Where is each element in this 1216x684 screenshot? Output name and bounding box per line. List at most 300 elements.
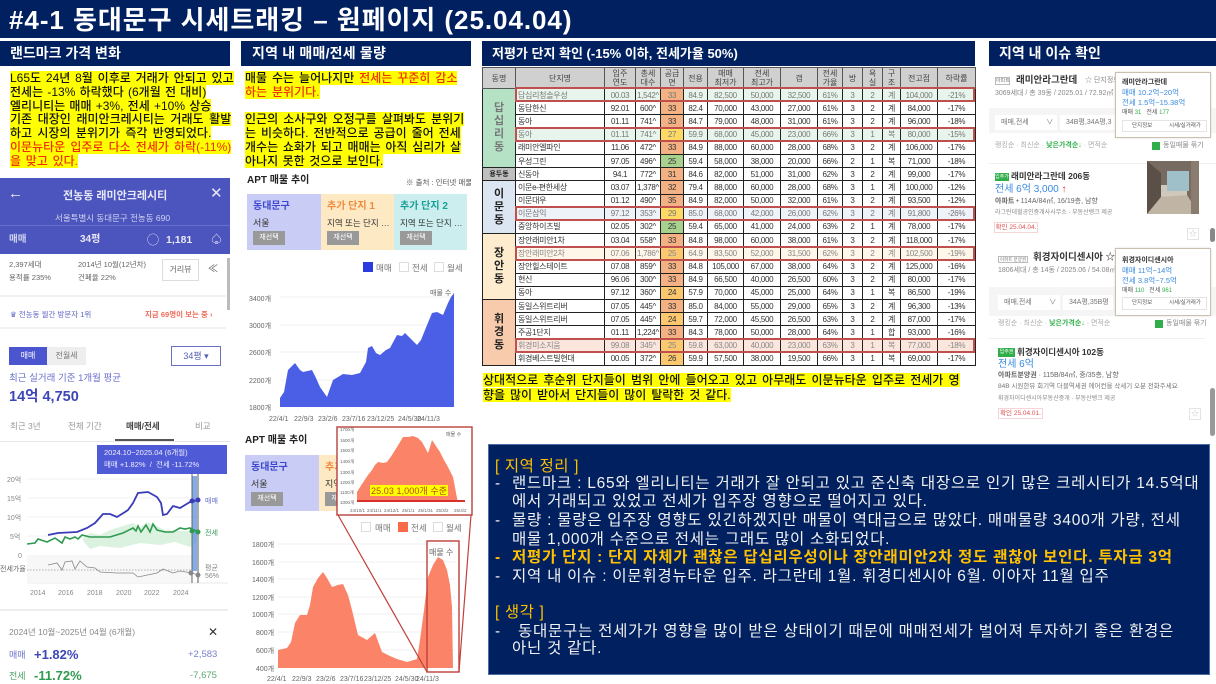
area chart: sale listings: 매물 수	[430, 289, 452, 297]
inset: rent listings zoomed chart: 25.03 1,000개 수준	[371, 486, 447, 496]
panel: Hwigyeong Xi listing: 34A평,35B평	[1069, 299, 1109, 306]
table: undervalued complexes: 50,000	[751, 196, 773, 205]
table: undervalued complexes: 59.4	[688, 157, 703, 166]
area chart: sale listings: 22/4/1	[269, 416, 289, 423]
table: undervalued complexes: 61%	[822, 196, 838, 205]
table: undervalued complexes: -17%	[948, 170, 965, 179]
line chart: sale and rent prices	[0, 474, 228, 611]
table: undervalued complexes: 84.3	[688, 328, 703, 337]
table: undervalued complexes: -18%	[948, 341, 965, 350]
panel: La Grande listing: 전세 6억 3,000 ↑	[995, 184, 1067, 195]
table: undervalued complexes: 372^	[640, 354, 656, 363]
table: undervalued complexes: 45,000	[751, 288, 773, 297]
chart heading: APT listings trend 1: APT 매물 추이	[247, 175, 309, 186]
inset: rent listings zoomed chart: 24/12/1	[384, 508, 400, 513]
table: undervalued complexes: 2	[870, 262, 875, 271]
line chart: sale and rent prices: 2024	[173, 590, 189, 597]
inset: rent listings zoomed chart: 25/1/31	[418, 508, 434, 513]
panel: complex info	[0, 258, 230, 310]
area chart: rent listings: 24/11/3	[416, 676, 439, 683]
table: undervalued complexes: 19,500	[788, 354, 810, 363]
text block: landmark summary: 기존 대장인 래미안크레시티는 거래도 활발	[10, 112, 231, 126]
table: undervalued complexes: 60%	[822, 275, 838, 284]
tab buttons	[9, 346, 221, 366]
table: undervalued complexes: 1	[870, 328, 875, 337]
table: undervalued complexes: 55,000	[751, 302, 773, 311]
table: undervalued complexes: 방	[849, 74, 856, 82]
table: undervalued complexes: 3	[850, 315, 855, 324]
table: undervalued complexes: 29	[668, 209, 676, 218]
table: undervalued complexes: 88,000	[714, 143, 737, 152]
text block: table conclusion: 상대적으로 후순위 단지들이 범위 안에 들어오고 있고 아무래도 이문뉴타운 입주로 전세가 영	[483, 373, 960, 387]
table: undervalued complexes: 3	[850, 341, 855, 350]
text block: landmark summary: 이문뉴타운 입주로 다소 전세가 하락(-11%)	[10, 140, 231, 154]
table: undervalued complexes: 32,500	[788, 91, 810, 100]
line chart: sale and rent prices: 2014	[30, 590, 46, 597]
table: undervalued complexes: 772^	[640, 170, 656, 179]
table: undervalued complexes: 27	[668, 130, 676, 139]
panel: La Grande listing: 라그란데힐공인중개사사무소 · 부동산뱅크 제공	[995, 210, 1112, 216]
visitor ranking strip: 지금 69명이 보는 중 ›	[145, 310, 212, 319]
table: undervalued complexes: 25	[668, 249, 676, 258]
table: undervalued complexes: 86,500	[908, 288, 930, 297]
tab buttons: 34평 ▾	[183, 351, 209, 361]
table: undervalued complexes: 02.05	[611, 222, 629, 231]
table: undervalued complexes: 24	[668, 288, 676, 297]
table: undervalued complexes: 00.03	[611, 91, 629, 100]
table: undervalued complexes: 45,500	[751, 315, 773, 324]
inset: rent listings zoomed chart: 1100개	[340, 489, 354, 496]
panel: regional summary: 아닌 것 같다.	[512, 640, 602, 657]
area chart: sale listings: 22/9/3	[294, 416, 314, 423]
popup: La Grande price range: 단지정보	[1132, 123, 1152, 129]
panel: Hwigyeong Xi listing: 랭킹순 · 최신순 · 낮은가격순↓ · 면적순	[998, 320, 1110, 327]
table: undervalued complexes: 496^	[640, 157, 656, 166]
table: undervalued complexes: 29,000	[788, 302, 810, 311]
panel: complex info: 용적률 235%	[9, 273, 51, 282]
table: undervalued complexes: 2	[870, 91, 875, 100]
table: undervalued complexes: 가율	[823, 78, 837, 87]
table: undervalued complexes: 62%	[822, 170, 838, 179]
table: undervalued complexes: 1,542^	[637, 91, 659, 100]
table: undervalued complexes: 계	[888, 196, 895, 205]
table: undervalued complexes: 59.9	[688, 354, 703, 363]
table: undervalued complexes: -19%	[948, 288, 965, 297]
table: undervalued complexes: 85.0	[688, 302, 703, 311]
table: undervalued complexes: 125,000	[906, 262, 932, 271]
panel: La Grande listing: 3069세대 / 총 39동 / 2025.01 / 72.92㎡ ~	[995, 90, 1119, 97]
source note: ※ 출처 : 인터넷 매물	[406, 178, 471, 187]
table: undervalued complexes: -17%	[948, 315, 965, 324]
table: undervalued complexes: 동명	[492, 74, 506, 82]
panel: Hwigyeong Xi listing: 확인 25.04.01.	[1000, 410, 1041, 417]
panel: complex info: 2,397세대	[9, 260, 42, 269]
table: undervalued complexes: 68,000	[714, 130, 737, 139]
table: undervalued complexes: 이문e-편한세상	[518, 183, 567, 192]
heading: undervalued complexes: 저평가 단지 확인 (-15% 이하, 전세가율 50%)	[492, 46, 738, 61]
text block: landmark summary	[10, 71, 234, 168]
icon: star: ☆	[1189, 229, 1197, 238]
table: undervalued complexes: 동아	[518, 117, 532, 126]
table: undervalued complexes: -17%	[948, 104, 965, 113]
panel: La Grande listing: 매매,전세 ∨	[1001, 119, 1053, 126]
area chart: sale listings: 24/11/3	[417, 416, 440, 423]
text block: landmark summary: L65도 24년 8월 이후로 거래가 안되고 있고	[10, 71, 234, 85]
area chart: sale listings: 2600개	[249, 348, 271, 357]
comparison cards 2: 동대문구	[251, 462, 288, 473]
table: undervalued complexes: 3	[850, 104, 855, 113]
panel: Hwigyeong Xi listing: 휘경자이디센시아 ☆	[1033, 252, 1115, 263]
table: undervalued complexes: 2	[870, 170, 875, 179]
text block: listings summary: 아나지 못한 것으로 보인다.	[245, 154, 383, 168]
text block: listings summary: 개수는 쇼화가 되고 매매는 아직 심리가 살	[245, 140, 461, 154]
table: undervalued complexes: 1	[870, 222, 875, 231]
area chart: sale listings: 23/7/16	[342, 416, 365, 423]
text: volume: 물량 : 물량은 입주장 영향도 있긴하겠지만 매물이 역대급으로 많았다. 매매물량 3400개 가량, 전세	[512, 512, 1181, 529]
table: undervalued complexes: 전용	[688, 74, 703, 82]
table: undervalued complexes: 07.05	[611, 315, 629, 324]
listing: 입주가	[995, 174, 1009, 180]
table: undervalued complexes: 욕	[869, 69, 876, 78]
line chart: sale and rent prices: 56%	[205, 573, 219, 580]
table: undervalued complexes: 102,500	[906, 249, 932, 258]
table: undervalued complexes: 84.9	[688, 143, 703, 152]
text block: listings summary	[245, 71, 464, 168]
table: undervalued complexes: -19%	[948, 249, 965, 258]
inset: rent listings zoomed chart: 1500개	[340, 447, 354, 454]
text block: landmark summary: 엘리니티는 매매 +3%, 전세 +10% 상승	[10, 99, 211, 113]
period tabs	[0, 418, 230, 442]
panel: Hwigyeong Xi listing: 매매,전세 ∨	[1004, 299, 1056, 306]
table: undervalued complexes: 87,000	[908, 315, 930, 324]
table: undervalued complexes: 98,000	[714, 236, 737, 245]
text: undervalued complexes: -	[495, 549, 500, 566]
table: undervalued complexes: 60,000	[751, 143, 773, 152]
title	[0, 0, 1216, 38]
table: undervalued complexes: 68,000	[714, 209, 737, 218]
panel: complex info: 거리뷰	[169, 265, 192, 274]
table: undervalued complexes: 57,500	[714, 354, 737, 363]
table: undervalued complexes: 71,000	[908, 157, 930, 166]
panel: apartment app header: ♤	[211, 234, 222, 246]
table: undervalued complexes: 92.01	[611, 104, 629, 113]
table: undervalued complexes: 신동아	[518, 170, 539, 179]
panel: apartment app header: ◯	[147, 233, 159, 247]
table: undervalued complexes: 62%	[822, 209, 838, 218]
line chart: sale and rent prices: 2020	[116, 590, 132, 597]
table: undervalued complexes: 67,000	[751, 262, 773, 271]
popup: Hwigyeong Xi price range	[1115, 248, 1211, 316]
table: undervalued complexes: 118,000	[906, 236, 932, 245]
table: undervalued complexes: 동	[494, 273, 504, 285]
visitor ranking strip: ♛ 전농동 월간 방문자 1위	[10, 310, 91, 319]
table: undervalued complexes: 72,000	[714, 315, 737, 324]
table: undervalued complexes: -16%	[948, 328, 965, 337]
legend 1: 매매	[376, 263, 392, 273]
panel: apartment app header: 매매	[9, 234, 26, 245]
area chart: rent listings: 1600개	[252, 558, 274, 567]
table: undervalued complexes: 24	[668, 315, 676, 324]
area chart: rent listings: 1000개	[252, 610, 274, 619]
inset: rent listings zoomed chart: 25/1/1	[402, 508, 415, 513]
table: undervalued complexes: 84,000	[714, 302, 737, 311]
table: undervalued complexes: 3	[850, 196, 855, 205]
table: undervalued complexes: 31	[668, 170, 676, 179]
table: undervalued complexes: 복	[888, 130, 895, 139]
panel: regional summary: 에서 거래되고 있었고 전세가 입주장 영향으로 떨어지고 있다.	[512, 493, 928, 510]
average price: 14억 4,750	[9, 389, 79, 405]
table: undervalued complexes: 동일스위트리버	[518, 302, 567, 311]
table: undervalued complexes: 50,000	[751, 328, 773, 337]
table: undervalued complexes: 302^	[640, 222, 656, 231]
table: undervalued complexes: 94.1	[613, 170, 627, 179]
table: undervalued complexes: 계	[888, 275, 895, 284]
table: undervalued complexes: 63,000	[714, 341, 737, 350]
summary: six month change: +1.82%	[34, 647, 78, 662]
area chart: sale listings: 3400개	[249, 294, 271, 303]
table: undervalued complexes: 대수	[641, 78, 655, 87]
table: undervalued complexes: 82,000	[714, 196, 737, 205]
table: undervalued complexes: 3	[850, 236, 855, 245]
table: undervalued complexes: 64.9	[688, 249, 703, 258]
table: undervalued complexes: 3	[850, 183, 855, 192]
area chart: rent listings: 800개	[256, 628, 274, 637]
line chart: sale and rent prices: 10억	[7, 514, 21, 522]
table: undervalued complexes: 3	[850, 262, 855, 271]
table: undervalued complexes: 28,000	[788, 143, 810, 152]
panel: La Grande listing	[989, 74, 1216, 242]
table: undervalued complexes: 91,800	[908, 209, 930, 218]
text block: landmark summary: 하고 시장의 분위기가 즉각 반영되었다.	[10, 126, 211, 140]
table: undervalued complexes: 88,000	[714, 183, 737, 192]
table: undervalued complexes: 면	[668, 78, 676, 87]
table: undervalued complexes: 복	[888, 157, 895, 166]
comparison cards 2: 서울	[251, 479, 268, 489]
area chart: sale listings	[249, 289, 455, 423]
area chart: rent listings: 600개	[256, 646, 274, 655]
table: undervalued complexes: 42,000	[751, 209, 773, 218]
table: undervalued complexes: -17%	[948, 222, 965, 231]
table: undervalued complexes: 2	[850, 222, 855, 231]
table: undervalued complexes: 31,000	[788, 170, 810, 179]
table: undervalued complexes: 복	[888, 354, 895, 363]
comparison cards 1	[247, 194, 467, 250]
heading: landmark price change: 랜드마크 가격 변화	[10, 45, 121, 61]
table: undervalued complexes: 리	[494, 128, 504, 140]
table: undervalued complexes: 26	[668, 354, 676, 363]
table: undervalued complexes: 84.9	[688, 275, 703, 284]
table: undervalued complexes: 3	[850, 170, 855, 179]
table: undervalued complexes: 33	[668, 104, 676, 113]
table: undervalued complexes: 33	[668, 236, 676, 245]
comparison cards 2	[245, 455, 337, 511]
table: undervalued complexes: 2	[870, 117, 875, 126]
heading: regional summary: [ 지역 정리 ]	[495, 458, 579, 475]
table: undervalued complexes: 104,000	[906, 91, 932, 100]
inset: rent listings zoomed chart: 1000개	[340, 499, 354, 506]
table: undervalued complexes: 99.08	[611, 341, 629, 350]
icon: back arrow: ←	[8, 185, 23, 202]
title: #4-1 동대문구 시세트래킹 – 원페이지 (25.04.04)	[9, 5, 572, 35]
heading: listings volume	[241, 41, 471, 66]
table: undervalued complexes: 38,000	[788, 262, 810, 271]
table: undervalued complexes: 59.7	[688, 315, 703, 324]
comparison cards 1: 재선택	[333, 234, 353, 241]
table: undervalued complexes: 계	[888, 222, 895, 231]
icon: close: ✕	[210, 185, 223, 202]
area chart: sale listings: 24/5/30	[398, 416, 421, 423]
table: undervalued complexes: 실	[869, 78, 876, 87]
table: undervalued complexes: 70,000	[714, 104, 737, 113]
text: thoughts: -	[495, 623, 500, 640]
table: undervalued complexes: 갭	[795, 74, 803, 82]
table: undervalued complexes: 80,000	[908, 275, 930, 284]
table: undervalued complexes: 70,000	[714, 288, 737, 297]
table: undervalued complexes: 입주	[613, 69, 627, 78]
table: undervalued complexes: 32,000	[788, 196, 810, 205]
table: undervalued complexes: 57.9	[688, 288, 703, 297]
table: undervalued complexes: 총세	[641, 69, 655, 78]
chart heading: APT listings trend 2: APT 매물 추이	[245, 435, 307, 446]
table: undervalued complexes: 전고점	[908, 74, 930, 82]
inset: rent listings zoomed chart: 24/11/1	[367, 508, 382, 513]
table: undervalued complexes: 계	[888, 91, 895, 100]
table: undervalued complexes: 33	[668, 91, 676, 100]
text block: table conclusion	[483, 373, 960, 402]
table: undervalued complexes: 1	[870, 288, 875, 297]
tab buttons: 매매	[21, 351, 35, 360]
table: undervalued complexes: 이문대우	[518, 196, 546, 205]
table: undervalued complexes: 64%	[822, 328, 838, 337]
table: undervalued complexes: 96,300	[908, 302, 930, 311]
table: undervalued complexes: -13%	[948, 302, 965, 311]
table: undervalued complexes: 1,786^	[637, 249, 659, 258]
table: undervalued complexes: 20,000	[788, 157, 810, 166]
table: undervalued complexes: 계	[888, 209, 895, 218]
callout: period tooltip: 2024.10~2025.04 (6개월)	[104, 448, 188, 457]
table: undervalued complexes: 79.4	[688, 183, 703, 192]
table: undervalued complexes: 3	[850, 302, 855, 311]
table: undervalued complexes: 경	[494, 326, 504, 338]
table: undervalued complexes: 전세	[823, 69, 837, 78]
table: undervalued complexes: 휘경베스트빌현대	[518, 354, 574, 363]
table: undervalued complexes: 2	[870, 249, 875, 258]
table: undervalued complexes: 26,500	[788, 275, 810, 284]
area chart: rent listings: 400개	[256, 664, 274, 673]
summary: six month change: 전세	[9, 671, 26, 681]
table: undervalued complexes: 96.06	[611, 275, 629, 284]
popup: Hwigyeong Xi price range: 휘경자이디센시아	[1122, 257, 1174, 264]
table: undervalued complexes: 96,000	[908, 117, 930, 126]
comparison cards 1: 지역 또는 단지 …	[400, 218, 463, 228]
table: undervalued complexes: 동아	[518, 288, 532, 297]
visitor ranking strip	[0, 299, 226, 329]
table: undervalued complexes: 600^	[640, 104, 656, 113]
table: undervalued complexes: 106,000	[906, 143, 932, 152]
table: undervalued complexes: 2	[870, 275, 875, 284]
table: undervalued complexes: 63%	[822, 222, 838, 231]
table: undervalued complexes: 38,000	[751, 354, 773, 363]
table: undervalued complexes: 2	[870, 209, 875, 218]
line chart: sale and rent prices: 0	[18, 553, 22, 560]
table: undervalued complexes: 93,000	[908, 328, 930, 337]
table: undervalued complexes: 84.7	[688, 117, 703, 126]
table: undervalued complexes: 계	[888, 117, 895, 126]
line chart: sale and rent prices: 2018	[87, 590, 103, 597]
table: undervalued complexes: 안	[494, 260, 504, 272]
table: undervalued complexes: 345^	[640, 341, 656, 350]
table: undervalued complexes: -15%	[948, 130, 965, 139]
inset: rent listings zoomed chart: 1300개	[340, 469, 354, 476]
summary: six month change: ✕	[208, 625, 218, 639]
period tabs: 매매/전세	[126, 421, 160, 431]
panel: Hwigyeong Xi listing	[989, 252, 1216, 436]
inset: rent listings zoomed chart: 1400개	[340, 458, 354, 465]
line chart: sale and rent prices: 평균	[205, 563, 218, 572]
table: undervalued complexes: 3	[850, 130, 855, 139]
listing photo	[1147, 161, 1199, 214]
table: undervalued complexes: 26,000	[788, 209, 810, 218]
table: undervalued complexes: 25	[668, 157, 676, 166]
table: undervalued complexes: 61%	[822, 104, 838, 113]
heading: regional issues	[989, 41, 1216, 66]
area chart: sale listings: 1800개	[249, 403, 271, 412]
table: undervalued complexes: 59.8	[688, 341, 703, 350]
comparison cards 1: 서울	[253, 218, 270, 228]
comparison cards 1: 추가 단지 2	[400, 201, 448, 212]
table: undervalued complexes: 50,000	[751, 91, 773, 100]
icon: star	[1189, 408, 1201, 420]
table: undervalued complexes: -16%	[948, 262, 965, 271]
table: undervalued complexes: 단지명	[549, 74, 571, 82]
icon: star: ☆	[1191, 409, 1199, 418]
panel: La Grande listing: 아파트 • 114A/84㎡, 16/19층, 남향	[995, 198, 1098, 205]
area chart: rent listings: 매물 수	[429, 548, 453, 557]
inset: rent listings zoomed chart	[336, 426, 473, 516]
table: undervalued complexes: 십	[494, 115, 504, 127]
summary: six month change: -7,675	[190, 670, 217, 681]
line chart: sale and rent prices: 5억	[10, 533, 20, 541]
table: undervalued complexes: 65,000	[714, 222, 737, 231]
table: undervalued complexes: 2	[870, 143, 875, 152]
table: undervalued complexes: 33	[668, 143, 676, 152]
table: undervalued complexes: -18%	[948, 157, 965, 166]
heading: thoughts: [ 생각 ]	[495, 604, 544, 621]
table: undervalued complexes: 61%	[822, 91, 838, 100]
table: undervalued complexes: 32	[668, 183, 676, 192]
area chart: rent listings: 1800개	[252, 540, 274, 549]
table: undervalued complexes: 360^	[640, 288, 656, 297]
panel: complex info: 건폐율 22%	[78, 273, 116, 282]
table: undervalued complexes: -12%	[948, 183, 965, 192]
table: undervalued complexes: 28,000	[788, 183, 810, 192]
panel: apartment app header	[0, 178, 230, 254]
table: undervalued complexes: 859^	[640, 262, 656, 271]
table: undervalued complexes: 01.12	[611, 196, 629, 205]
table: undervalued complexes: 40,000	[751, 341, 773, 350]
table: undervalued complexes: 25	[668, 341, 676, 350]
table: undervalued complexes: 33	[668, 302, 676, 311]
table: undervalued complexes: 3	[850, 209, 855, 218]
table: undervalued complexes: 59.4	[688, 222, 703, 231]
table: undervalued complexes: 68%	[822, 183, 838, 192]
inset: rent listings zoomed chart: 매물 수	[446, 431, 462, 438]
text: landmark: -	[495, 475, 500, 492]
summary: six month change: +2,583	[188, 649, 217, 660]
text: landmark: 랜드마크 : L65와 엘리니티는 거래가 잘 안되고 있고 준신축 대장으로 인기 많은 크레시티가 14.5억대	[512, 475, 1199, 492]
table: undervalued complexes: 63%	[822, 315, 838, 324]
table: undervalued complexes: 45,000	[751, 130, 773, 139]
